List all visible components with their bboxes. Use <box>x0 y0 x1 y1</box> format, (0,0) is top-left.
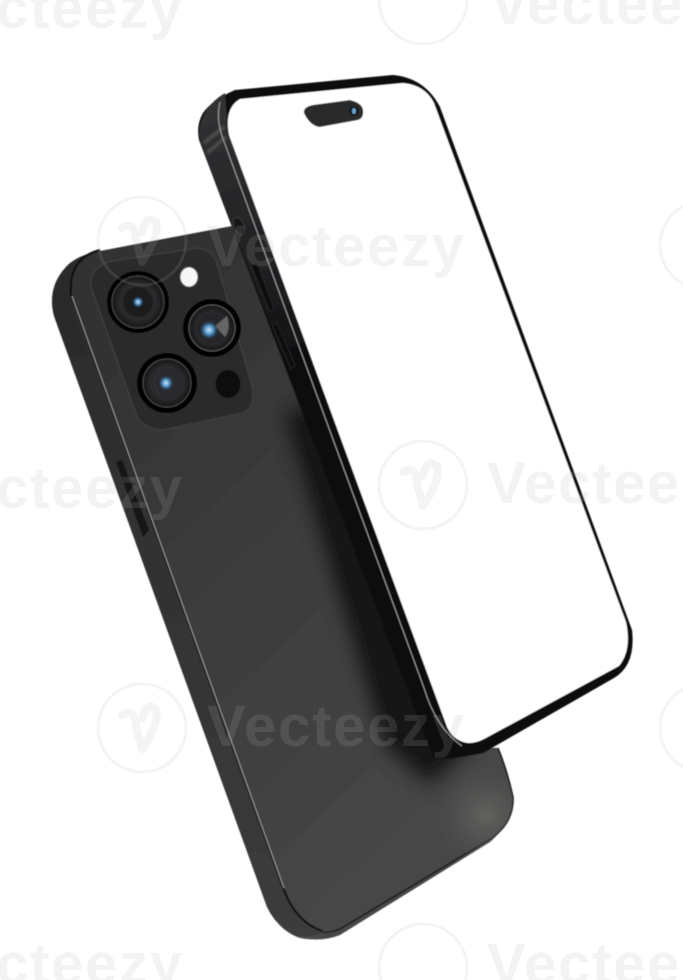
lighter side band <box>199 93 327 400</box>
flash <box>180 267 198 287</box>
left side button <box>116 460 149 537</box>
left rim of back phone <box>52 251 322 937</box>
front camera <box>350 106 358 116</box>
front phone side frame <box>198 75 633 758</box>
back phone <box>52 226 536 940</box>
watermark text: Vecteezy <box>207 694 466 759</box>
dynamic island <box>304 100 363 127</box>
light reflection on lower corner <box>460 785 514 852</box>
screen <box>228 83 628 743</box>
side reflection <box>204 127 226 153</box>
front phone <box>198 75 633 758</box>
frame highlight line <box>218 102 462 746</box>
lens: right <box>183 299 241 357</box>
lens: top left <box>107 271 169 333</box>
rim highlight <box>71 250 322 931</box>
back phone body <box>52 226 513 940</box>
bottom edge of back phone <box>322 748 513 932</box>
camera plateau <box>91 248 253 430</box>
lens: bottom <box>137 353 197 413</box>
lidar sensor <box>216 370 240 398</box>
watermark text: Vecteezy <box>207 214 466 279</box>
camera module <box>91 248 253 430</box>
volume and mute buttons <box>231 216 295 369</box>
shadow cast by front phone <box>285 410 470 785</box>
